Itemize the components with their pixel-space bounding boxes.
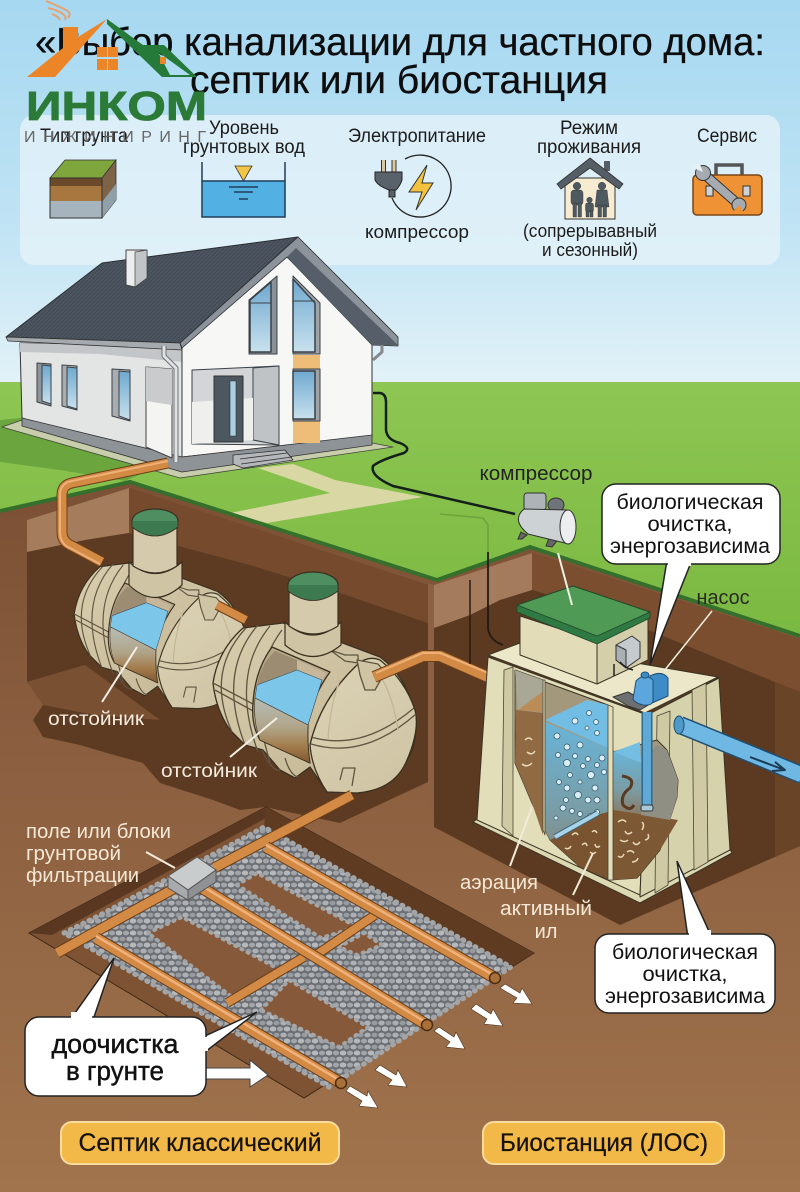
button: classic septic: Септик классический (78, 1129, 322, 1157)
trench (29, 807, 534, 1098)
ground edge (0, 482, 800, 636)
label: settler 1: отстойник (48, 709, 145, 730)
callout: post-treatment in soil: в грунте (66, 1056, 164, 1086)
callout: biological treatment bottom (595, 861, 775, 1013)
lower window (293, 369, 320, 421)
eave (6, 337, 182, 350)
porch (192, 366, 279, 445)
chamber 1 air (515, 670, 543, 710)
tank leader: settler 1 (102, 647, 137, 702)
logo: small window (160, 57, 166, 64)
callout: post-treatment in soil (25, 958, 268, 1096)
factor: groundwater level: грунтовых вод (183, 137, 305, 158)
factor: soil type (40, 126, 128, 218)
side windows (37, 363, 130, 421)
aeration chamber sludge (550, 812, 608, 879)
pit 1 walls (27, 488, 434, 827)
pipe between tanks (217, 605, 246, 620)
callout: biological treatment bottom: очистка, (642, 963, 728, 986)
label: aeration: аэрация (460, 872, 538, 894)
callout: post-treatment in soil: доочистка (52, 1029, 179, 1059)
soil gaps (148, 873, 382, 1047)
factor: occupancy: проживания (537, 137, 641, 158)
gable wall (182, 257, 372, 457)
cross pipes (227, 915, 375, 1003)
filtration field (29, 795, 534, 1098)
callout: biological treatment top: очистка, (648, 513, 732, 536)
main pipe (57, 795, 352, 953)
button: biostation (483, 1122, 724, 1164)
label: active sludge: ил (535, 921, 557, 943)
house (2, 237, 398, 478)
callout: biological treatment top: энергозависима (610, 535, 770, 558)
septic tank 2 (213, 572, 416, 793)
logo: orange roof (27, 19, 107, 77)
partitions (543, 680, 613, 880)
front door (214, 376, 243, 442)
top plate (488, 643, 718, 713)
pit 2 walls (434, 553, 800, 925)
soil mass (0, 483, 800, 1192)
title: септик или биостанция (190, 59, 608, 102)
factor: power supply: Электропитание (348, 126, 486, 147)
pipe ends (336, 972, 500, 1088)
septic tank 1 (74, 509, 249, 709)
control box (614, 636, 640, 676)
cut-out outline (641, 745, 678, 820)
leader: pump (664, 611, 712, 671)
factor: service (693, 126, 762, 215)
aeration chamber water (545, 722, 608, 878)
outlet pipe (680, 725, 800, 775)
tank 1 riser (129, 509, 182, 598)
pavement around house (2, 420, 393, 478)
green lid (517, 586, 650, 641)
lid box (520, 616, 597, 684)
station front face (477, 657, 647, 895)
blue discharge pipe (641, 712, 653, 811)
chamber 1 surface (518, 692, 542, 712)
flow arrow (622, 776, 634, 808)
label: active sludge (500, 898, 592, 943)
steps (233, 450, 293, 468)
plinth (22, 418, 372, 472)
label: filtration field: фильтрации (26, 864, 139, 887)
logo: smoke (46, 1, 70, 20)
right downpipe (373, 345, 382, 360)
sludge flakes (522, 738, 649, 862)
pump base (613, 692, 650, 710)
label: filtration field: грунтовой (26, 842, 121, 865)
tank 2 riser (285, 572, 341, 656)
outflow arrows (346, 984, 532, 1108)
gable band (180, 237, 398, 348)
aeration tube (555, 813, 598, 837)
walkway (230, 464, 423, 523)
pipe from house (60, 461, 168, 564)
aeration chamber surface (545, 700, 608, 748)
lawn shade (0, 418, 150, 481)
grass lawn (0, 382, 800, 652)
logo: green roof (107, 19, 197, 77)
flow arrow on outlet (750, 757, 785, 771)
label: compressor: компрессор (480, 463, 592, 485)
label: filtration field: поле или блоки (26, 820, 171, 843)
factor: soil type: Тип грунта (40, 126, 128, 147)
roof slope (6, 237, 298, 343)
title: «Выбор канализации для частного дома: (35, 21, 765, 64)
station right face (640, 678, 730, 897)
logo: subtitle: ИНЖИНИРИНГ (24, 129, 206, 146)
callout: biological treatment top: биологическая (616, 491, 764, 514)
factor: service: Сервис (697, 126, 757, 147)
gravel bed (64, 827, 511, 1087)
station flange (473, 810, 732, 903)
factor: occupancy: Режим (560, 118, 618, 139)
third chamber surface (613, 742, 641, 763)
leader: filtration field (146, 852, 175, 868)
outlet pipe end (674, 716, 684, 734)
factor: power supply: компрессор (365, 222, 469, 242)
factor: occupancy (523, 118, 657, 260)
compressor (518, 493, 576, 547)
button: biostation: Биостанция (ЛОС) (500, 1129, 708, 1157)
tall triangular window right (293, 276, 320, 354)
label: pump: насос (696, 587, 750, 609)
annex wall (146, 367, 172, 458)
downpipe (164, 346, 176, 462)
pipe to biostation (374, 580, 488, 677)
tall triangular window left (249, 276, 277, 354)
factor: occupancy: (сопрерывавный (523, 221, 657, 241)
chimney (126, 250, 147, 287)
leader: sludge (573, 853, 593, 895)
logo (24, 1, 207, 146)
biostation (473, 586, 800, 903)
label: settler 2: отстойник (161, 761, 258, 782)
callout: biological treatment bottom: биологическая (612, 941, 758, 964)
callout: biological treatment bottom: энергозависима (605, 985, 765, 1008)
factor: groundwater level: Уровень (209, 118, 279, 139)
factor: occupancy: и сезонный) (542, 240, 638, 260)
pump (633, 672, 668, 705)
chamber 1 sludge (515, 710, 543, 835)
leader: aeration (510, 807, 532, 866)
corner ribs (502, 667, 708, 893)
bubbles (554, 710, 606, 820)
logo: window (97, 47, 118, 70)
orange panels (293, 355, 320, 369)
factor panel (20, 115, 780, 265)
callout: biological treatment top (602, 484, 780, 665)
laterals (96, 845, 495, 1083)
logo: wordmark: ИНКОМ (26, 83, 207, 129)
sky background (0, 0, 800, 400)
factor: power supply (348, 126, 486, 242)
factor: groundwater level (183, 118, 305, 217)
distribution box (168, 857, 216, 900)
title (35, 21, 765, 102)
power cable (373, 393, 515, 514)
side wall (20, 343, 182, 470)
label: active sludge: активный (500, 898, 592, 920)
tank leader: settler 2 (230, 718, 277, 757)
third chamber water (613, 752, 641, 815)
label: filtration field (26, 820, 171, 887)
control wire (440, 514, 503, 645)
cut-out void (515, 670, 678, 880)
third chamber sludge (613, 810, 678, 880)
leader: compressor to station (558, 553, 572, 605)
button: classic septic (61, 1122, 339, 1164)
